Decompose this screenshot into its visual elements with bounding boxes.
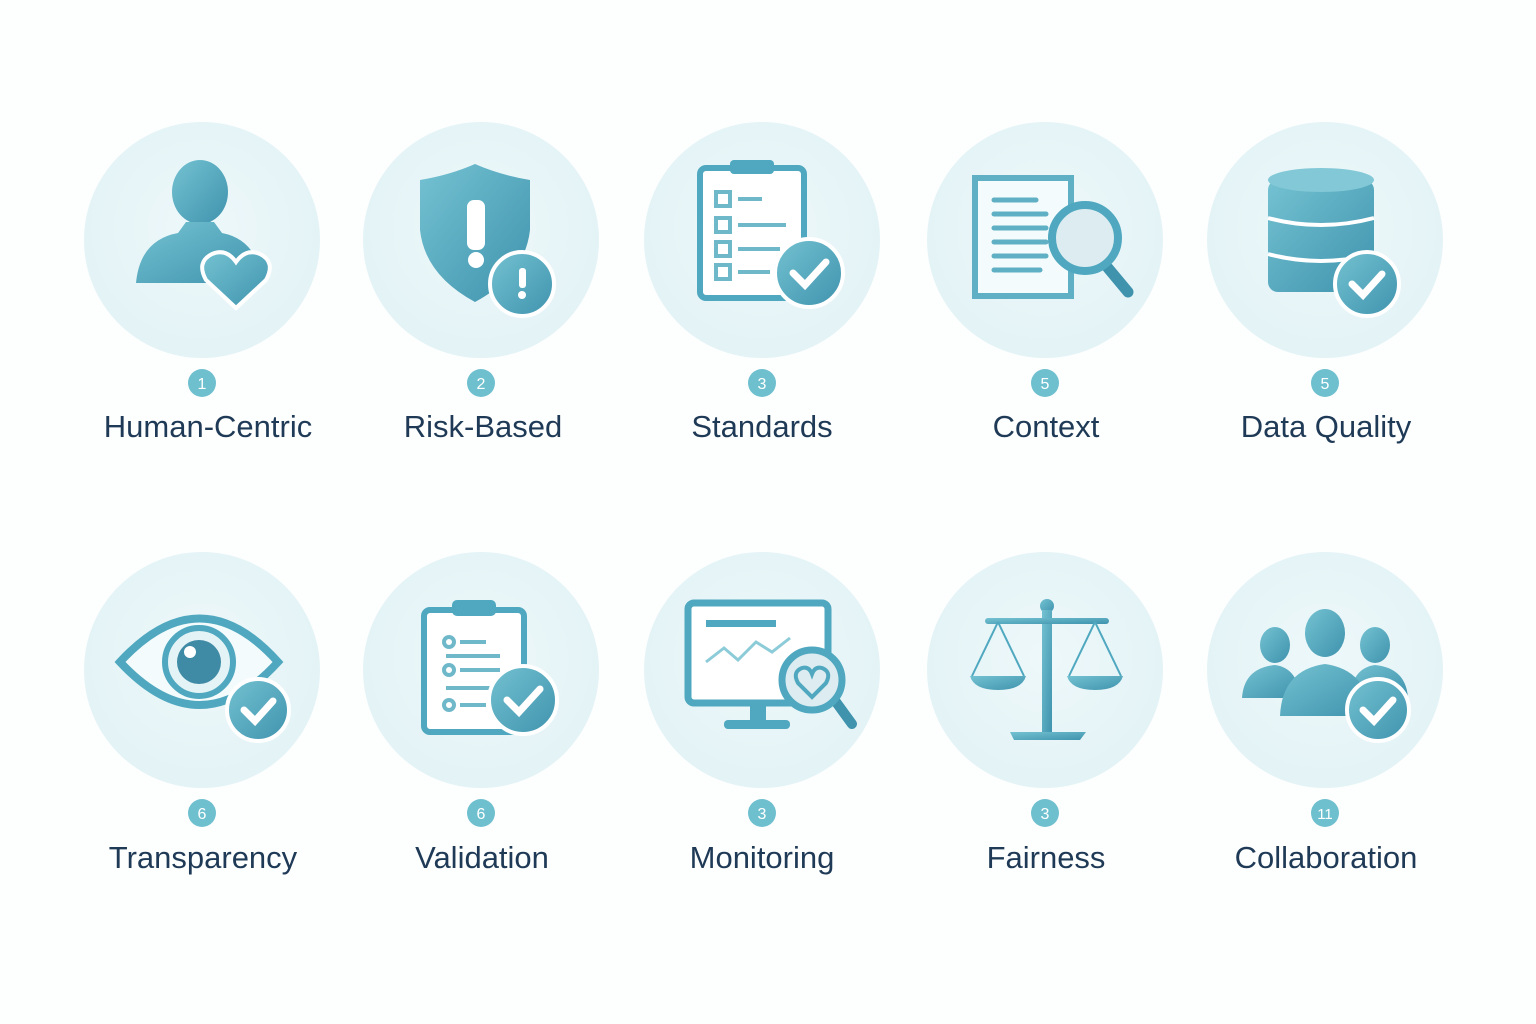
label: Human-Centric [104, 409, 312, 444]
badge 6 [188, 799, 216, 827]
item: Transparency: Transparency [109, 840, 298, 875]
item: Monitoring [644, 552, 880, 875]
badge 1 [188, 369, 216, 397]
badge 3 [748, 799, 776, 827]
item: Fairness [927, 552, 1163, 875]
badge 6 [467, 799, 495, 827]
badge 6: 6 [198, 806, 207, 823]
icon: database with check [1268, 168, 1399, 316]
item: Data Quality [1207, 122, 1443, 444]
item: Standards [644, 122, 880, 444]
item: Context: Context [993, 409, 1100, 444]
item: Fairness: Fairness [987, 840, 1105, 875]
badge 5 [1031, 369, 1059, 397]
badge 3: 3 [758, 376, 767, 393]
item: Risk-Based [363, 122, 599, 444]
badge 3: 3 [1041, 806, 1050, 823]
badge 3: 3 [758, 806, 767, 823]
item: Transparency [84, 552, 320, 875]
icon: clipboard with check [424, 600, 557, 734]
badge 5: 5 [1321, 376, 1330, 393]
item: Validation [363, 552, 599, 875]
item: Human-Centric [84, 122, 320, 444]
badge 5 [1311, 369, 1339, 397]
icon: scales [970, 599, 1123, 740]
icon: group with check [1242, 609, 1409, 741]
icon: monitor with magnifier heart [688, 603, 852, 729]
badge 11: 11 [1317, 806, 1333, 823]
badge 3 [1031, 799, 1059, 827]
icon: eye with check [120, 618, 289, 741]
badge 6: 6 [477, 806, 486, 823]
item: Data Quality: Data Quality [1241, 409, 1412, 444]
badge 3 [748, 369, 776, 397]
item: Validation: Validation [415, 840, 549, 875]
icon: shield with alert [420, 164, 554, 316]
icon: person with heart [136, 160, 270, 308]
item: Monitoring: Monitoring [690, 840, 834, 875]
badge 2 [467, 369, 495, 397]
icon: document with magnifier [975, 178, 1128, 296]
item: Context [927, 122, 1163, 444]
item: Collaboration: Collaboration [1235, 840, 1417, 875]
badge 2: 2 [477, 376, 486, 393]
item: Standards: Standards [691, 409, 833, 444]
badge 1: 1 [198, 376, 207, 393]
badge 11 [1311, 799, 1339, 827]
badge 5: 5 [1041, 376, 1050, 393]
item: Risk-Based: Risk-Based [404, 409, 562, 444]
icon: checklist clipboard [700, 160, 843, 307]
item: Collaboration [1207, 552, 1443, 875]
